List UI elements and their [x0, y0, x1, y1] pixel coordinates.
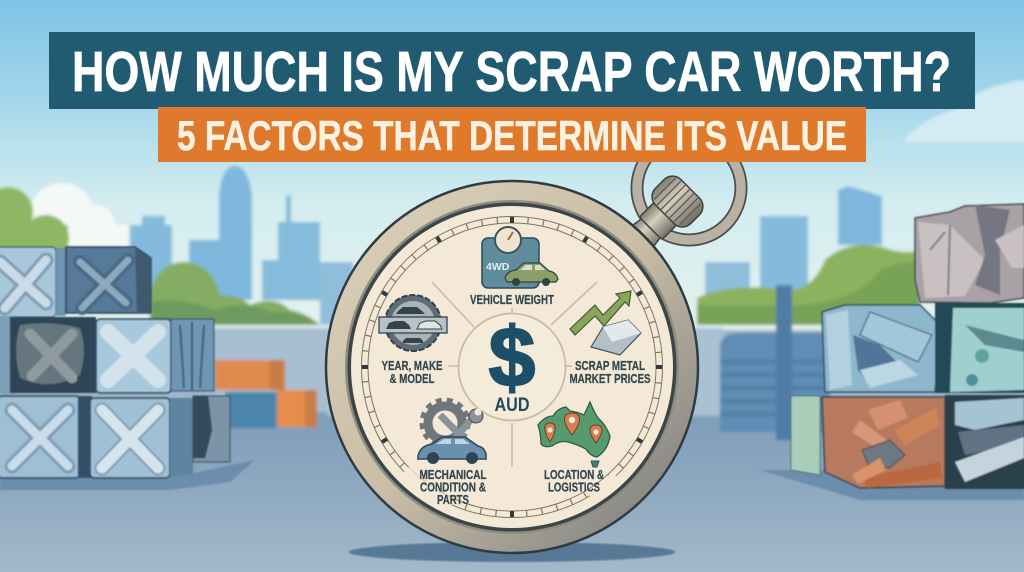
crushed rust cube	[822, 397, 945, 488]
label: LOCATION &	[544, 467, 604, 482]
dollar sign: $	[489, 310, 535, 404]
icon: scale with car: 4WD	[486, 261, 510, 273]
watch case	[326, 181, 698, 553]
top row cubes	[0, 247, 151, 317]
label: VEHICLE WEIGHT	[470, 292, 554, 307]
mint side strip	[791, 396, 820, 475]
inner bezel	[345, 200, 679, 534]
minute track	[362, 216, 662, 518]
icon: Australia map with pins	[538, 402, 610, 467]
label: SCRAP METAL	[575, 358, 645, 373]
stack of crushed metal cubes: left	[0, 247, 230, 478]
crumpled grey cube	[915, 204, 1024, 303]
factor: scrap metal market prices	[570, 291, 651, 386]
crumpled blue cube	[822, 305, 940, 392]
subtitle banner: 5 FACTORS THAT DETERMINE ITS VALUE	[177, 112, 847, 159]
stopwatch	[326, 136, 741, 553]
middle row cubes	[0, 316, 214, 394]
label: MARKET PRICES	[570, 371, 651, 386]
stack of crushed metal cubes: right	[791, 204, 1024, 489]
factor: mechanical condition and parts	[418, 400, 487, 507]
shadow under right stack	[760, 470, 1024, 500]
icon: badge with cars	[379, 295, 447, 351]
label: YEAR, MAKE	[382, 358, 443, 373]
factor: location and logistics	[538, 402, 610, 494]
factor: year, make and model	[379, 295, 447, 386]
label: CONDITION &	[420, 480, 486, 494]
dial spokes	[432, 282, 597, 467]
bottom row cubes	[0, 396, 230, 478]
crumpled mint cube	[935, 303, 1024, 393]
factor: vehicle weight	[470, 227, 558, 307]
crown ring	[637, 136, 741, 240]
crown ring highlight	[637, 136, 741, 240]
ground shadow of stopwatch	[349, 542, 675, 562]
label: PARTS	[437, 492, 469, 507]
label: MECHANICAL	[420, 467, 487, 482]
icon: gear, wrench and car	[418, 400, 486, 464]
crown stem and knob	[616, 171, 708, 263]
dial face	[351, 206, 673, 528]
AUD label: AUD	[494, 395, 530, 416]
shadow under left stack	[0, 460, 255, 490]
dark steel cube	[945, 395, 1024, 489]
label: & MODEL	[390, 371, 435, 386]
icon: rising arrow and ingot	[570, 291, 641, 355]
label: LOGISTICS	[548, 480, 600, 494]
centre ring	[458, 314, 566, 420]
